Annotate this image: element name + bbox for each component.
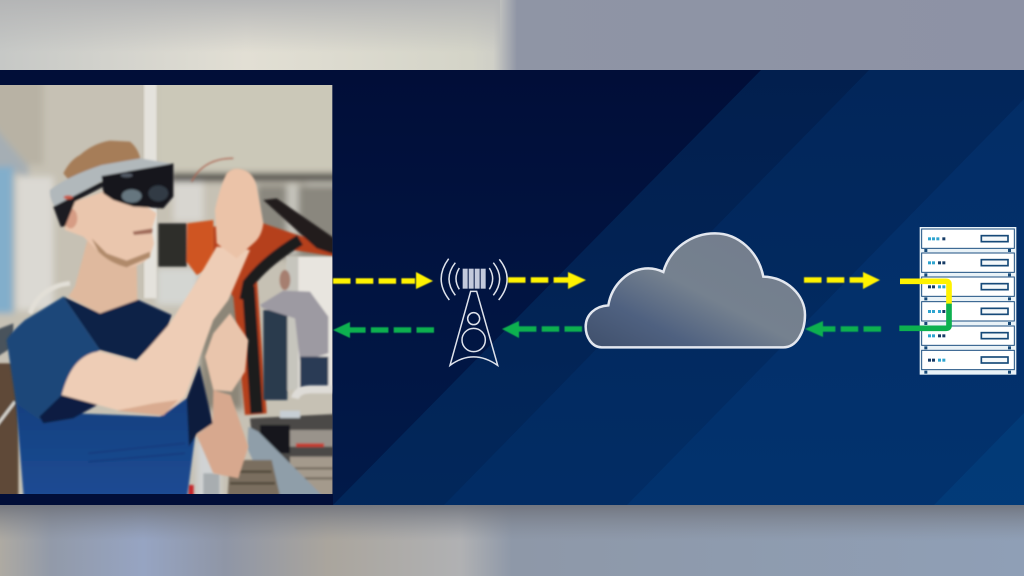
tower signal waves: [441, 259, 507, 300]
connection arrows: tower to headset, downlink green: [333, 322, 434, 338]
person: overalls: [16, 398, 195, 513]
icon: server rack: [899, 227, 1016, 375]
photo background: cable and left edge machine: [0, 158, 233, 510]
main navy panel with diagonal bands: [0, 70, 1024, 505]
connection arrows: cloud to tower, green: [502, 321, 582, 338]
server loop line: yellow incoming segment: [900, 281, 949, 304]
connection arrows: headset to tower, uplink yellow: [333, 272, 433, 289]
server unit 6: [922, 350, 1014, 370]
server unit 2: [922, 253, 1014, 272]
icon: cloud: [586, 233, 805, 347]
photo background: workshop: [0, 85, 332, 494]
photo background: vertical column: [144, 77, 157, 298]
person: dark right side of shirt: [187, 365, 213, 447]
server rack feet: [924, 249, 1011, 374]
connection arrows: server to cloud, green: [805, 321, 881, 337]
photo: engineer wearing a mixed reality headset: [0, 85, 332, 494]
person: headset: [50, 158, 173, 227]
person: raised hand: [215, 169, 263, 258]
blurred top background strip: [0, 0, 1024, 70]
photo background: workbench and rails: [187, 384, 332, 494]
connection arrows: cloud to server, yellow: [804, 272, 880, 289]
server unit 3: [922, 277, 1014, 296]
tower mast: [450, 291, 498, 365]
person: t-shirt sleeve: [7, 297, 100, 420]
person: raised arm: [62, 247, 250, 415]
connection arrows: tower to cloud, yellow: [508, 272, 586, 289]
blurred bottom background strip: [0, 505, 1024, 576]
person: [7, 141, 263, 513]
person: face: [63, 192, 157, 267]
photo background: window and blurred colleague: [260, 255, 332, 402]
server unit 5: [922, 326, 1014, 345]
tower antenna panel: [463, 269, 486, 289]
server unit 1: [922, 229, 1014, 248]
person: hair: [63, 141, 141, 183]
person: left forearm and lower hand: [197, 313, 248, 478]
server loop line: green outgoing segment: [899, 304, 949, 328]
icon: cell tower: [441, 259, 507, 365]
photo background: orange robot arm: [158, 198, 347, 415]
server unit 4: [922, 302, 1014, 321]
person: dark chest: [63, 297, 172, 360]
person: neck: [68, 237, 137, 313]
